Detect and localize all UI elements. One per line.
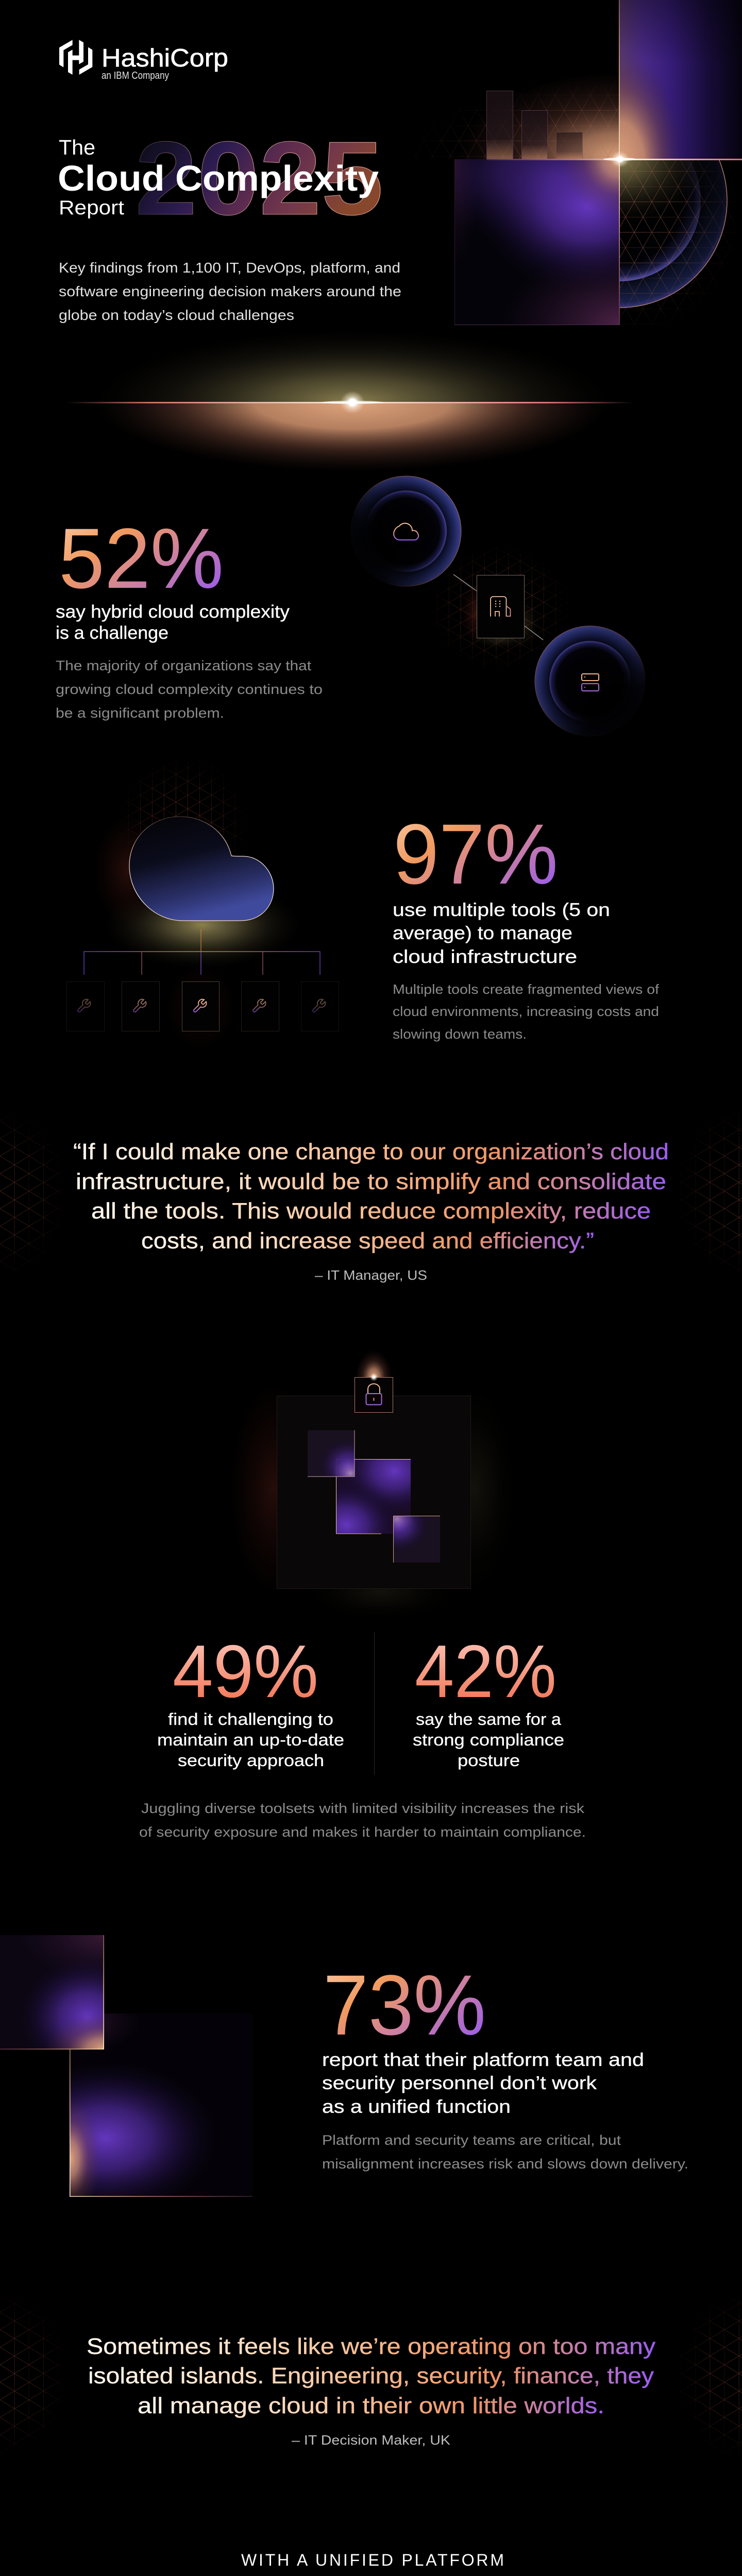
tool box 2 [122,982,160,1031]
stat headline [56,602,290,643]
panel: 49 and 42 percent [139,1630,586,1840]
purple column [619,0,742,159]
quote text [87,2334,655,2418]
panel: quote 1 [0,1108,742,1283]
circle: server [535,626,645,736]
stat headline: use multiple tools (5 on [393,899,610,920]
stat description: growing cloud complexity continues to [56,682,323,697]
stat description [56,658,323,721]
stat headline [322,2049,644,2117]
attribution: – IT Decision Maker, UK [292,2432,451,2448]
triangle grid above line [415,83,619,159]
panel: 52 percent [56,476,645,736]
glow under cloud [104,881,300,969]
icon: cloud [394,523,418,540]
tool box 3 [164,963,237,1051]
diagram grid [434,548,566,668]
stat description: be a significant problem. [56,705,224,721]
stat description: Platform and security teams are critical, but [322,2132,621,2148]
stat headline: is a challenge [56,623,168,643]
glow behind bars [472,81,619,159]
icon: lock [366,1384,381,1404]
hero artwork [415,0,742,328]
circle: cloud [351,476,461,586]
quote text: infrastructure, it would be to simplify and consolidate [76,1169,666,1194]
icon: server [582,674,599,691]
stat description: Juggling diverse toolsets with limited visibility increases the risk [141,1801,585,1816]
quote text: all the tools. This would reduce complexity, reduce [91,1198,651,1224]
divider [374,1632,375,1775]
quote text: Sometimes it feels like we’re operating on too many [87,2334,655,2359]
stat headline: report that their platform team and [322,2049,644,2070]
hybrid diagram [351,476,645,736]
side grid right [675,2290,742,2460]
bar chart decoration [486,91,582,160]
star flare [603,151,636,167]
stat 73%: 73% [323,1958,486,2053]
quote text: costs, and increase speed and efficiency.” [141,1228,594,1253]
title year 2025: 2025 [135,120,383,237]
purple square [454,159,620,325]
hero intro text [59,260,401,323]
quote text: “If I could make one change to our organization’s cloud [73,1139,669,1164]
side grid left [0,1115,65,1269]
stat 49%: 49% [173,1630,318,1713]
rect center purple [336,1459,411,1534]
attribution: – IT Manager, US [315,1267,427,1283]
stat 42 headline: strong compliance [413,1731,564,1749]
panel: 73 percent [0,1935,687,2197]
title report: Report [59,197,124,219]
diagram grid [122,760,244,856]
rectangle upper [0,1935,104,2049]
cloud and tools diagram [67,755,339,1051]
stat description: slowing down teams. [393,1026,527,1042]
hero intro text: globe on today’s cloud challenges [59,307,294,323]
stat 49 headline: find it challenging to [168,1710,333,1728]
stat description [139,1801,586,1840]
stat 42 headline: posture [458,1751,520,1770]
stat 49 headline [157,1710,344,1770]
stat 97%: 97% [393,807,558,902]
stat description: cloud environments, increasing costs and [393,1004,659,1019]
hero intro text: Key findings from 1,100 IT, DevOps, platform, and [59,260,400,276]
rect top left [308,1430,355,1477]
logo tagline: an IBM Company [102,70,169,81]
lock flare [356,1350,393,1404]
stat 49 headline: security approach [178,1751,324,1770]
panel: quote 2 [0,2290,742,2460]
stat description [393,981,660,1042]
glow divider [69,343,630,467]
stat 42 headline [413,1710,564,1770]
concentric circles [620,160,736,328]
panel: security illustration [243,1353,493,1603]
stat description: of security exposure and makes it harder to maintain compliance. [139,1824,586,1840]
tool boxes [67,963,339,1051]
stat headline [393,899,610,967]
stat description: Multiple tools create fragmented views of [393,981,660,997]
stat description: The majority of organizations say that [56,658,312,673]
icon: hashicorp mark [59,40,92,75]
overlapping rectangles [0,1935,252,2197]
quote text: all manage cloud in their own little worlds. [138,2393,604,2418]
side grid right [680,1115,742,1272]
quote text [73,1139,669,1253]
stat headline: as a unified function [322,2096,511,2117]
stat headline: security personnel don’t work [322,2072,597,2093]
stat headline: cloud infrastructure [393,946,577,967]
rect bottom right [393,1516,440,1563]
lock box [355,1373,393,1413]
title the: The [59,135,95,159]
stat description: misalignment increases risk and slows down delivery. [322,2156,688,2172]
panel: 97 percent [67,755,660,1051]
hero intro text: software engineering decision makers around the [59,283,401,299]
logo wordmark: HashiCorp [102,44,228,72]
tree connector [84,929,320,975]
side grid left [0,2290,70,2460]
tool box 5 [301,982,339,1031]
connector lines [453,574,543,640]
title main: Cloud Complexity [58,158,379,198]
panel: hero [58,0,742,474]
tool box 4 [241,982,279,1031]
stat headline: say hybrid cloud complexity [56,602,290,622]
glowing horizontal line [486,159,742,160]
large box [277,1396,471,1589]
tool box 1 [67,982,104,1031]
stat headline: average) to manage [393,922,572,943]
icon: building [491,597,511,616]
side glows [229,1381,317,1597]
rectangle lower [70,2013,252,2197]
stat 52%: 52% [59,511,224,606]
section heading: WITH A UNIFIED PLATFORM [241,2551,504,2569]
cloud [129,817,274,921]
stat 42%: 42% [415,1630,556,1713]
logo: HashiCorp [59,40,228,81]
stat description [322,2132,688,2172]
quote text: isolated islands. Engineering, security, finance, they [88,2363,654,2388]
stat 42 headline: say the same for a [416,1710,561,1728]
title [58,120,383,237]
box: building [461,575,540,649]
stat 49 headline: maintain an up-to-date [157,1731,344,1749]
